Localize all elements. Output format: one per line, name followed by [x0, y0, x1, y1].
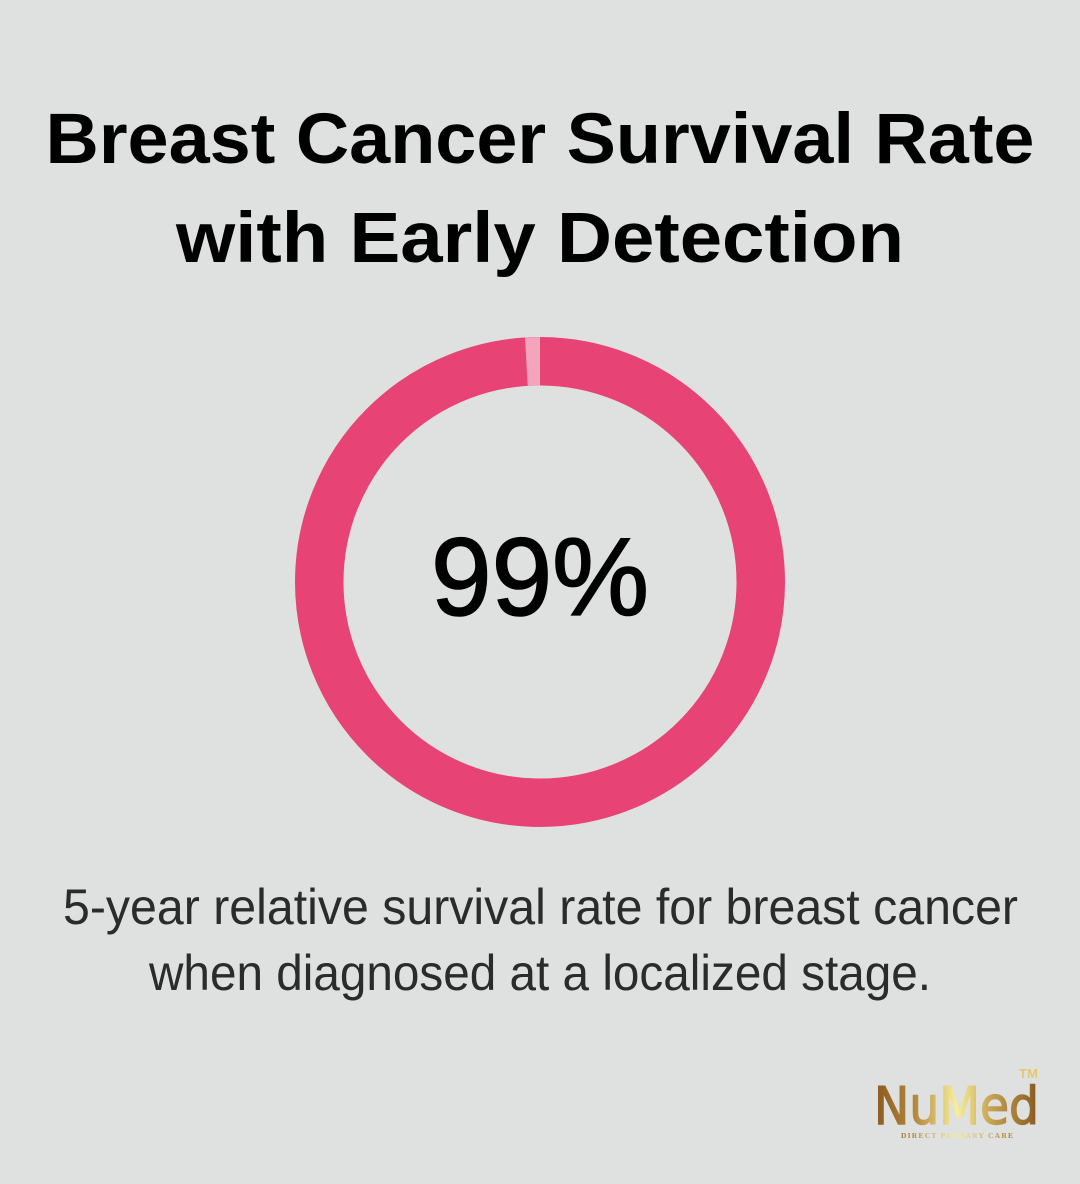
logo trademark: TM	[1019, 1067, 1038, 1081]
description text: 5-year relative survival rate for breast cancer	[63, 879, 1018, 935]
logo tagline: DIRECT PRIMARY CARE	[901, 1131, 1013, 1140]
title	[46, 100, 1034, 278]
logo wordmark: NuMed	[874, 1077, 1039, 1137]
title: with Early Detection	[175, 199, 904, 278]
logo: NuMed	[874, 1067, 1039, 1140]
description text: when diagnosed at a localized stage.	[148, 945, 931, 1001]
centre value: 99%	[431, 516, 649, 639]
description text	[63, 879, 1018, 1001]
remaining segment: 1%	[525, 337, 540, 386]
title: Breast Cancer Survival Rate	[46, 100, 1034, 179]
donut chart: 99%	[319, 337, 761, 803]
main segment: 99%	[319, 361, 761, 803]
